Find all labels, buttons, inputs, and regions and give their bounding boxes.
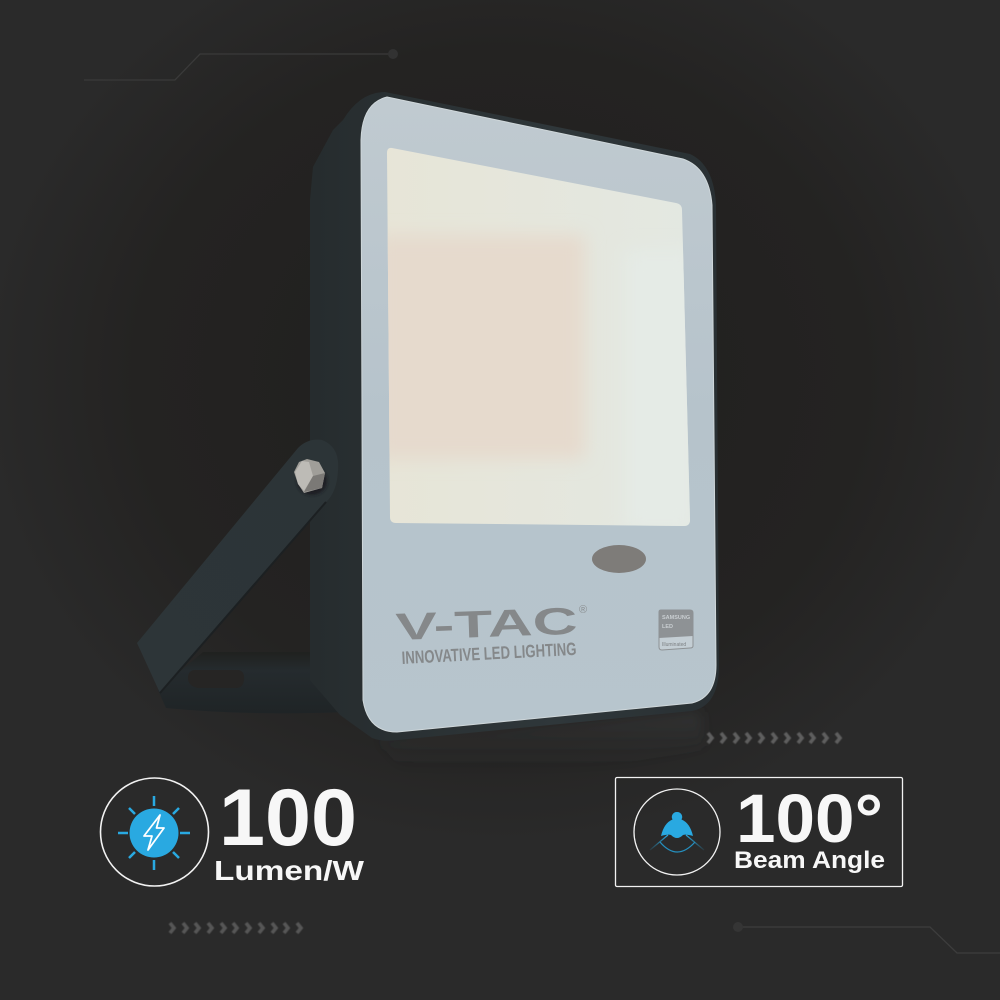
- label: Beam Angle: Beam Angle: [734, 847, 885, 874]
- brand tagline: INNOVATIVE LED LIGHTING: [401, 639, 577, 668]
- samsung LED badge: LED: [662, 624, 673, 630]
- decorative circuit line: top left: [84, 49, 398, 80]
- front glass: [361, 97, 716, 732]
- motion sensor: [592, 545, 646, 573]
- stat: 100 degree beam angle: [616, 778, 902, 886]
- stat: 100 lumen per watt: [100, 773, 365, 886]
- light window: [387, 148, 690, 526]
- value: 100 degrees: 100°: [736, 780, 883, 857]
- stat frame: [616, 778, 902, 886]
- hex bolt: [294, 459, 327, 495]
- samsung LED badge: [659, 610, 693, 650]
- chevron row: lower left: [170, 923, 301, 933]
- decorative circuit line: bottom right: [733, 922, 1000, 953]
- lamp reflection: [378, 712, 706, 773]
- housing side and rim: [310, 92, 719, 741]
- icon: sun with lightning bolt: [100, 778, 208, 886]
- mounting bracket arm: [137, 440, 338, 693]
- icon: lamp with beam angle: [634, 789, 720, 875]
- samsung LED badge: SAMSUNG: [662, 615, 690, 621]
- value: 100: 100: [219, 773, 357, 863]
- mounting bracket foot: [158, 652, 345, 713]
- chevron row: upper right: [708, 733, 840, 743]
- label: Lumen/W: Lumen/W: [214, 855, 365, 886]
- brand logo: V-TAC: [395, 601, 578, 649]
- brand logo: ®: [579, 604, 587, 616]
- samsung LED badge: Illuminated: [662, 642, 686, 648]
- floodlight product photo: [137, 92, 719, 741]
- brand logo: [395, 601, 587, 649]
